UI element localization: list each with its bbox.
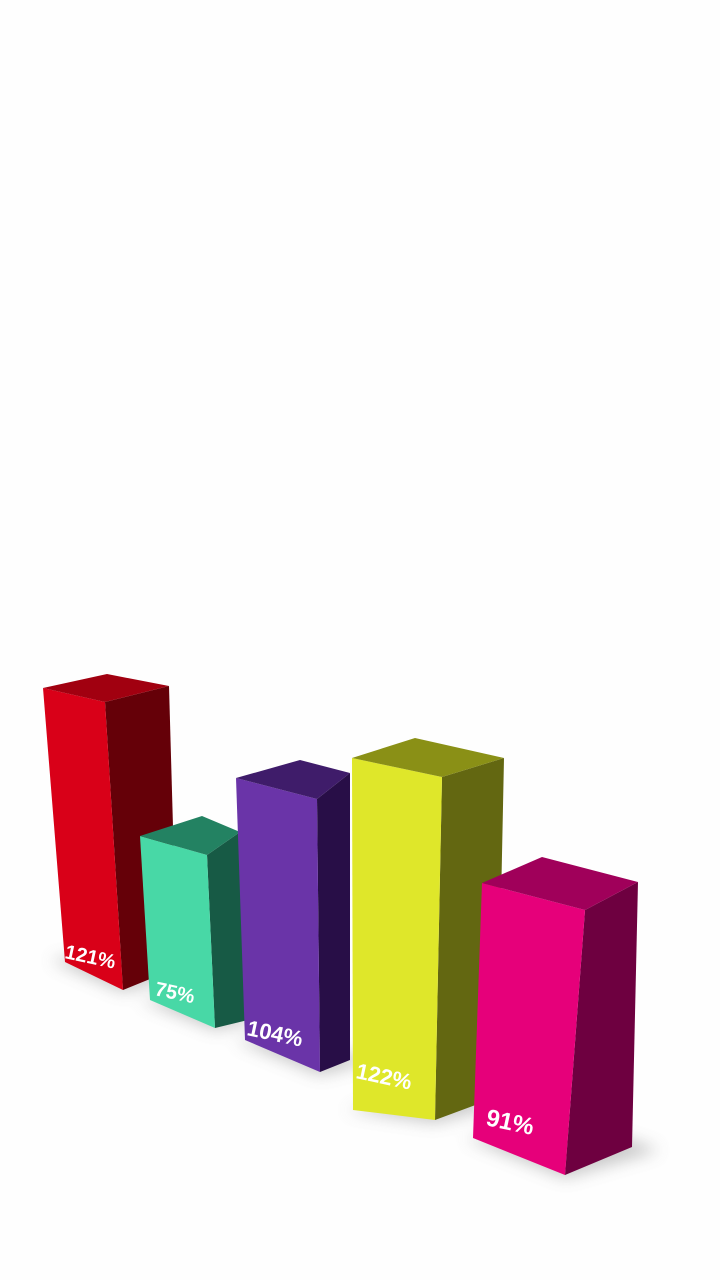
bar: 75% — [140, 816, 248, 1028]
bar: 122%: 122% — [354, 1058, 414, 1095]
shadows — [50, 950, 660, 1178]
bar: 91% — [473, 857, 638, 1175]
bar: 121%: 121% — [63, 941, 118, 974]
bar: 104% — [236, 760, 350, 1072]
bar: 75%: 75% — [153, 978, 197, 1008]
bar: 104%: 104% — [245, 1015, 305, 1052]
bar: 91%: 91% — [484, 1104, 536, 1141]
bar: 121% — [43, 674, 177, 990]
bar: 122% — [352, 738, 504, 1120]
